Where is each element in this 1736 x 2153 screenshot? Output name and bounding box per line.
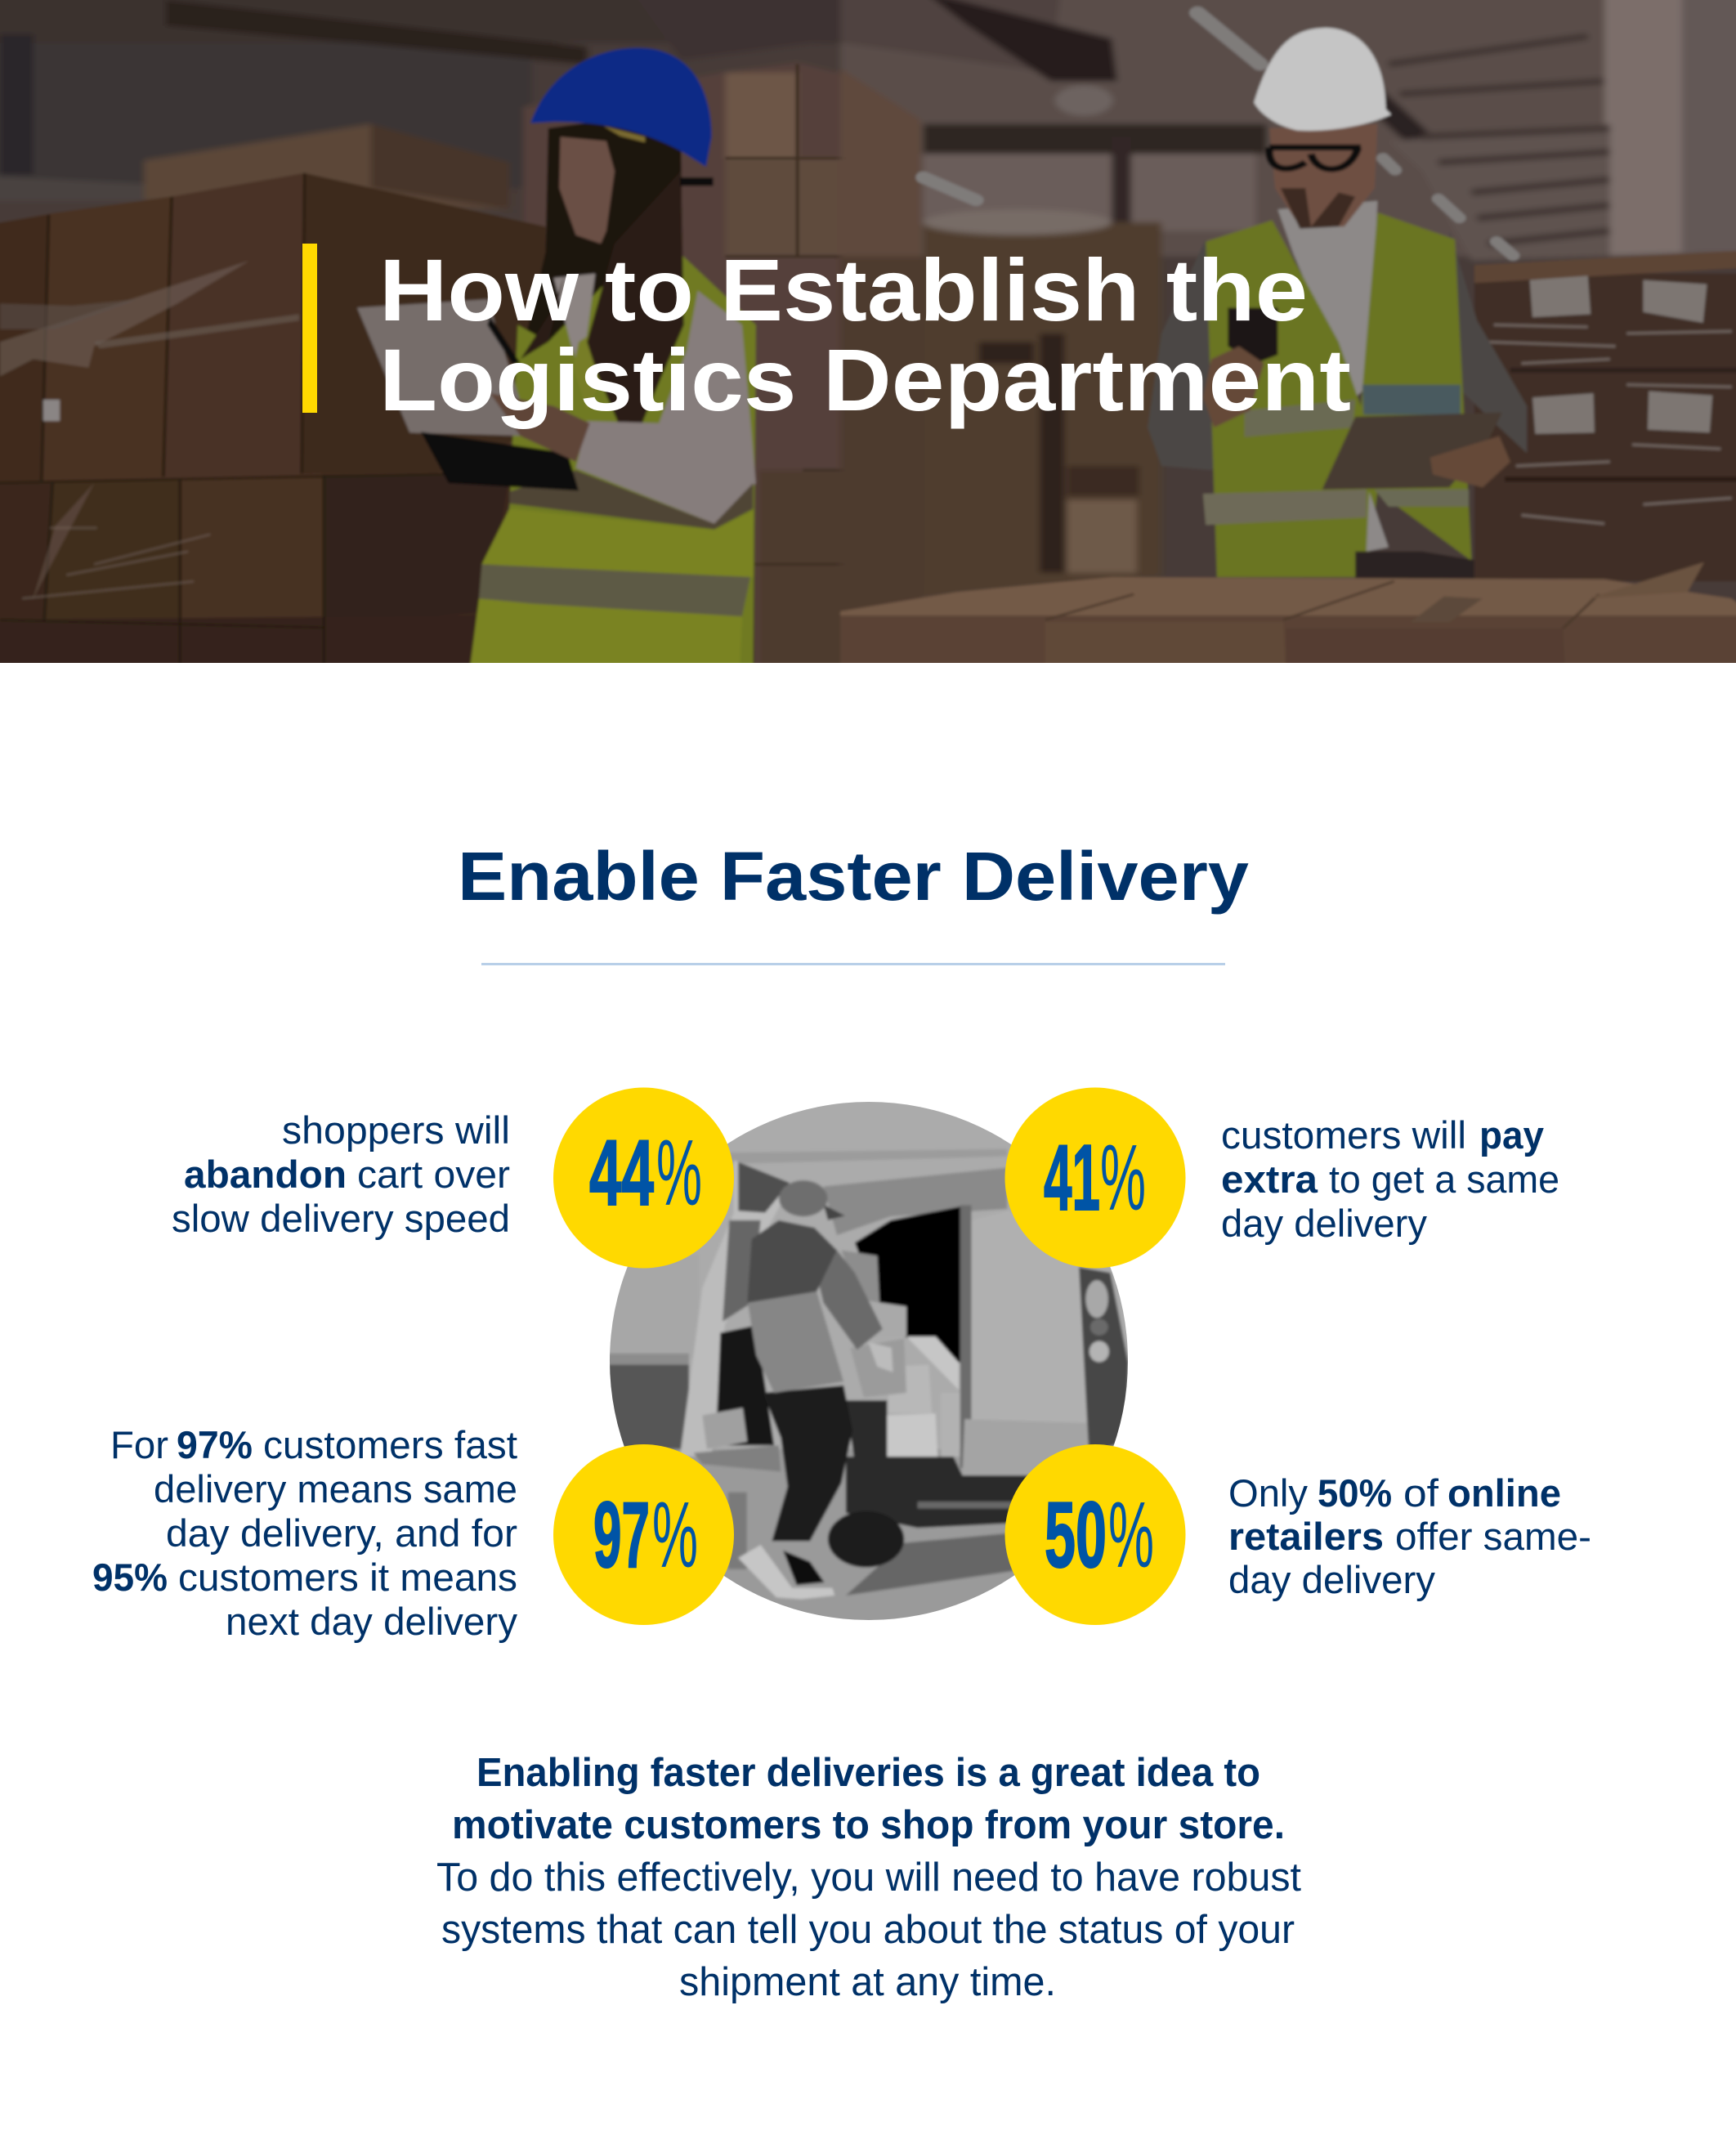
hero photo: warehouse workers — [0, 0, 1736, 687]
stat badge: 44%: 44 — [589, 1121, 654, 1225]
stat badge: 50% — [1005, 1444, 1185, 1625]
section heading: Enable Faster Delivery — [458, 838, 1249, 915]
title — [379, 240, 1351, 429]
stat badge: 41% — [1005, 1087, 1185, 1269]
stat badge: 41%: 41 — [1044, 1126, 1100, 1230]
text block: online retailers: 50% — [1318, 1471, 1392, 1515]
closing paragraph — [436, 1751, 1301, 2004]
stat badge: 97%: 97 — [593, 1484, 650, 1587]
text block: fast delivery definitions: day delivery, and for — [166, 1511, 517, 1555]
icon: white hard hat — [1254, 28, 1391, 131]
stat badge: 44%: % — [656, 1121, 702, 1225]
text block: fast delivery definitions: 97% — [177, 1423, 253, 1466]
shrink-wrapped pallet — [1474, 250, 1736, 581]
text block: shoppers abandon cart: slow delivery speed — [172, 1197, 510, 1240]
hero background: left warehouse and stacked boxes — [0, 0, 842, 663]
hero background: right warehouse and pallets — [840, 0, 1736, 684]
text block: shoppers abandon cart: cart over — [357, 1153, 510, 1196]
title: Logistics Department — [379, 330, 1351, 429]
text block: fast delivery definitions: 95% — [92, 1555, 168, 1599]
text block: shoppers abandon cart — [172, 1108, 510, 1240]
text block: customers pay extra — [1221, 1113, 1559, 1245]
text block: fast delivery definitions: customers it means — [178, 1555, 517, 1599]
stat badge: 41%: % — [1100, 1126, 1146, 1230]
man worker — [1148, 28, 1527, 580]
closing paragraph: Enabling faster deliveries is a great idea to — [477, 1751, 1260, 1795]
text block: fast delivery definitions: For — [110, 1423, 168, 1466]
bumper and wheel — [846, 1457, 1030, 1528]
text block: online retailers: Only — [1228, 1471, 1309, 1515]
light streaks — [924, 13, 1513, 256]
text block: customers pay extra: extra — [1221, 1157, 1318, 1201]
text block: customers pay extra: customers will — [1221, 1113, 1466, 1157]
text block: shoppers abandon cart: shoppers will — [282, 1108, 510, 1152]
closing paragraph: To do this effectively, you will need to have robust — [436, 1855, 1301, 1900]
stat badge: 97% — [553, 1444, 734, 1625]
cargo boxes — [841, 1251, 879, 1303]
front cardboard boxes — [839, 562, 1736, 663]
text block: shoppers abandon cart: abandon — [184, 1153, 347, 1196]
text block: customers pay extra: to get a same — [1329, 1157, 1559, 1201]
text block: fast delivery definitions: next day delivery — [226, 1600, 518, 1643]
text block: online retailers — [1228, 1471, 1591, 1601]
central photo: courier loading a van — [599, 1094, 1146, 1633]
van interior — [855, 1205, 967, 1363]
text block: online retailers: of — [1403, 1471, 1439, 1515]
closing paragraph: shipment at any time. — [679, 1960, 1056, 2004]
stat badge: 50%: 50 — [1045, 1484, 1107, 1587]
text block: customers pay extra: day delivery — [1221, 1202, 1427, 1245]
text block: customers pay extra: pay — [1479, 1113, 1544, 1157]
stat badge: 44% — [553, 1087, 734, 1269]
stat badge: 97%: % — [652, 1484, 698, 1587]
text block: online retailers: day delivery — [1228, 1558, 1435, 1601]
woman worker — [357, 48, 756, 684]
text block: fast delivery definitions: customers fast — [263, 1423, 517, 1466]
title: How to Establish the — [379, 240, 1308, 339]
text block: fast delivery definitions: delivery means same — [154, 1467, 517, 1511]
title accent bar — [302, 244, 317, 413]
text block: online retailers: online — [1447, 1471, 1561, 1515]
text block: online retailers: retailers — [1228, 1515, 1384, 1558]
stat badge: 50%: % — [1108, 1484, 1154, 1587]
text block: fast delivery definitions — [92, 1423, 518, 1643]
van body — [963, 1211, 1089, 1475]
closing paragraph: motivate customers to shop from your store. — [452, 1803, 1285, 1847]
icon: blue hard hat — [530, 48, 712, 167]
open van door — [680, 1160, 792, 1457]
courier — [846, 1400, 887, 1464]
text block: online retailers: offer same- — [1395, 1515, 1591, 1558]
closing paragraph: systems that can tell you about the status of your — [441, 1908, 1295, 1952]
tail light — [1079, 1267, 1128, 1452]
